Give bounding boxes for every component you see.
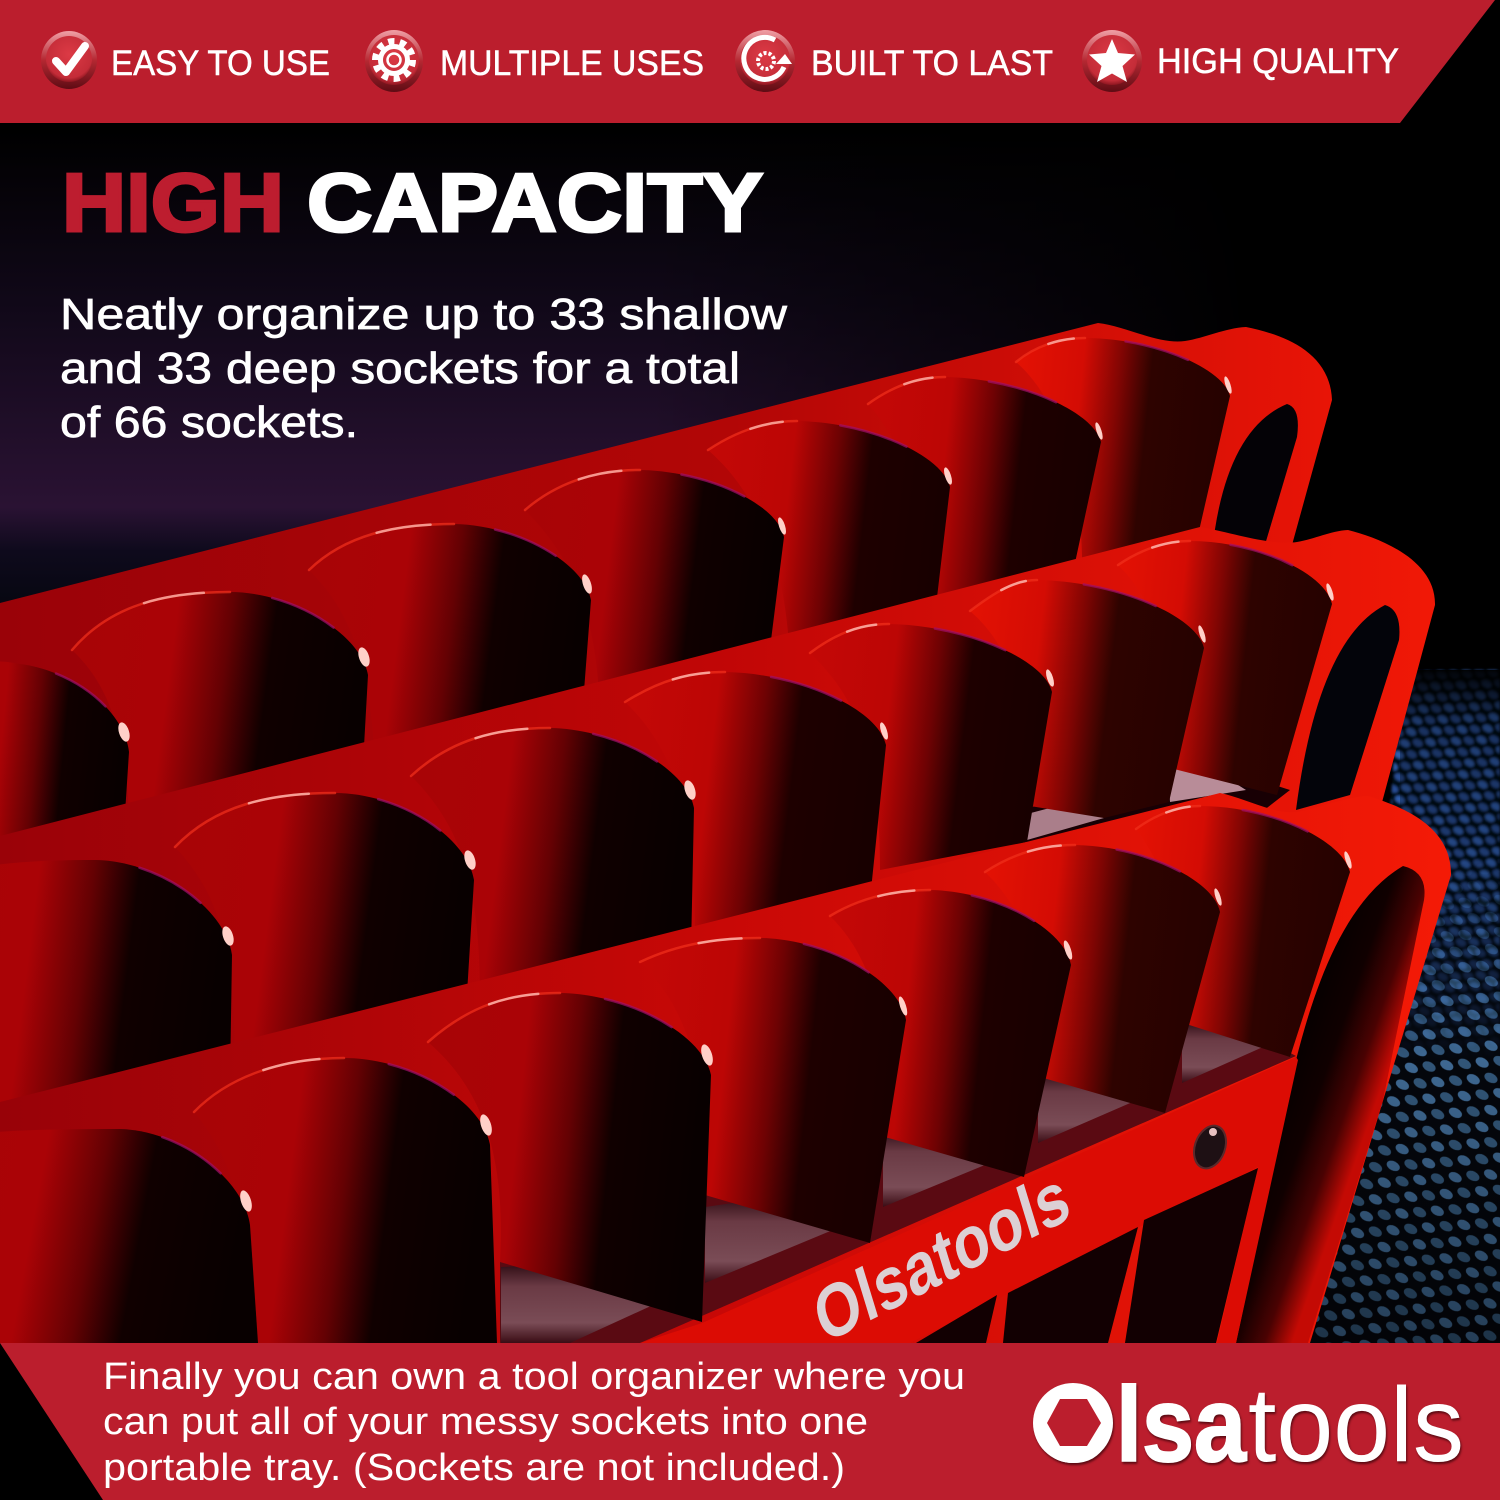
bottom description text (103, 1356, 965, 1489)
icon: gear (365, 30, 423, 92)
top banner (0, 0, 1495, 123)
headline (62, 156, 763, 249)
capacity description (60, 290, 787, 447)
Olsatools logo: lsa (1116, 1366, 1247, 1484)
back tray (0, 323, 1332, 900)
middle tray (0, 527, 1435, 1200)
front tray slot channel (500, 1000, 1296, 1343)
bottom banner (0, 1343, 1500, 1500)
feature: built to last (735, 30, 1053, 92)
bottom description text: Finally you can own a tool organizer where you (103, 1356, 965, 1398)
back tray socket cups (0, 338, 1230, 900)
middle tray handle hole (1296, 605, 1399, 810)
capacity description: and 33 deep sockets for a total (60, 344, 740, 393)
middle tray slot openings (1027, 745, 1290, 860)
bottom description text: can put all of your messy sockets into one (103, 1401, 868, 1443)
label: high quality: HIGH QUALITY (1157, 42, 1399, 81)
engraved tray logo: Olsatools (805, 1154, 1078, 1359)
icon: star (1082, 30, 1142, 92)
front tray dark panels (916, 1168, 1258, 1343)
back tray shoulder highlights (116, 376, 1233, 743)
front tray pink slots (501, 1020, 1263, 1343)
front tray side leg in shadow (1236, 866, 1425, 1343)
label: built to last: BUILT TO LAST (811, 44, 1053, 83)
front tray (0, 793, 1451, 1359)
icon: cycle gear (735, 30, 795, 92)
capacity description: of 66 sockets. (60, 398, 358, 447)
headline: HIGH (62, 156, 284, 249)
middle tray shoulder highlights (220, 583, 1335, 947)
carbon fibre surface (1300, 670, 1500, 1343)
back tray handle hole (1212, 404, 1298, 552)
front tray cup rims (120, 806, 1350, 1225)
front tray lower rail (640, 1057, 1298, 1343)
Olsatools logo: tools (1248, 1366, 1464, 1484)
feature: multiple uses (365, 30, 704, 92)
Olsatools logo: O (1034, 1364, 1114, 1485)
screw (1188, 1121, 1232, 1173)
Olsatools logo (1033, 1364, 1464, 1485)
feature: easy to use (41, 31, 330, 89)
headline: CAPACITY (307, 156, 763, 249)
middle tray cup rims (96, 541, 1332, 955)
front tray socket cups (0, 806, 1350, 1343)
front tray shoulder highlights (238, 851, 1353, 1213)
middle tray socket cups (0, 541, 1332, 1150)
label: multiple uses: MULTIPLE USES (440, 44, 704, 83)
bottom description text: portable tray. (Sockets are not included.) (103, 1447, 845, 1489)
capacity description: Neatly organize up to 33 shallow (60, 290, 787, 339)
back tray cup rims (20, 338, 1230, 752)
label: easy to use: EASY TO USE (111, 44, 330, 83)
icon: check mark (41, 31, 97, 89)
feature: high quality (1082, 30, 1399, 92)
